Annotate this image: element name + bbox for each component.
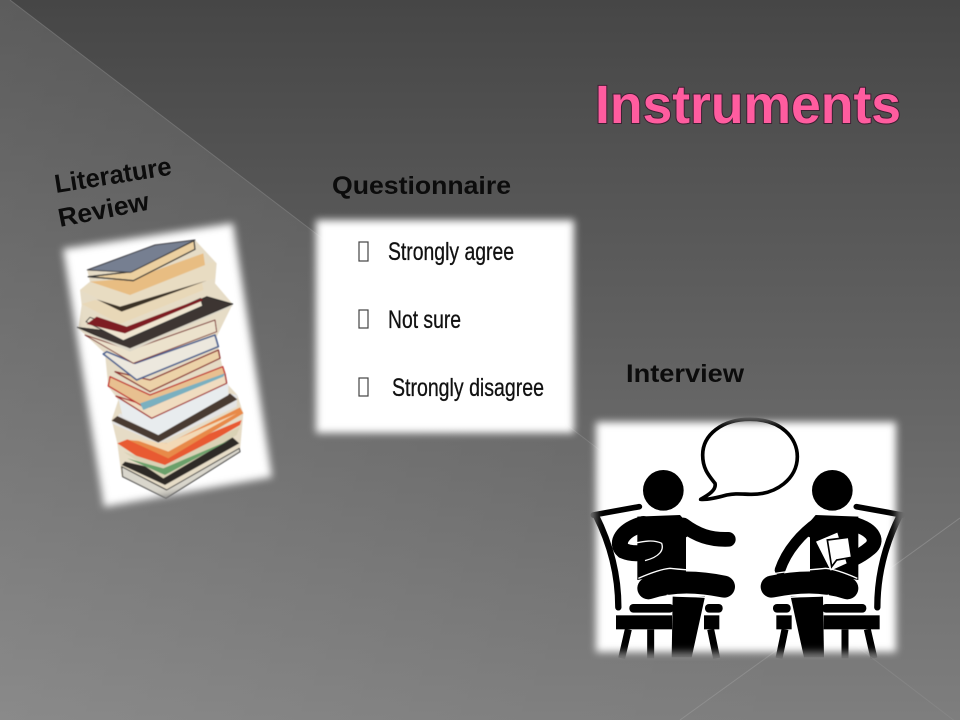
- panel: stack of books: [58, 218, 277, 512]
- icon: bottom book: [122, 437, 240, 498]
- heading: literature review: Literature: [52, 151, 173, 199]
- cream book: [85, 320, 217, 363]
- heading: interview: Interview: [626, 360, 745, 388]
- option: strongly agree: [358, 241, 514, 266]
- title: Instruments: [595, 75, 901, 135]
- option: strongly disagree: Strongly disagree: [392, 374, 544, 402]
- option: not sure: [358, 309, 460, 329]
- red-edged books: [116, 374, 227, 418]
- option: strongly disagree: [358, 377, 544, 402]
- maroon book: [86, 298, 203, 341]
- heading: questionnaire: Questionnaire: [332, 172, 511, 200]
- book stack backing: [78, 240, 243, 498]
- heading: literature review: [52, 151, 173, 233]
- option: strongly agree: Strongly agree: [388, 238, 514, 266]
- coloured middle books: [117, 420, 242, 466]
- white book: [112, 393, 237, 443]
- dark wide book: [77, 297, 233, 350]
- blue-edged book: [103, 335, 218, 380]
- heading: literature review: Review: [55, 186, 152, 233]
- blue-grey top book: [88, 241, 195, 281]
- tan books: [82, 281, 203, 324]
- panel: questionnaire options: [305, 210, 585, 445]
- option: not sure: Not sure: [388, 306, 461, 334]
- icon: speech bubble: [701, 419, 797, 499]
- icon: left person on chair: [593, 470, 730, 658]
- panel: interview illustration: [585, 410, 910, 665]
- icon: right person on chair with papers: [766, 470, 902, 658]
